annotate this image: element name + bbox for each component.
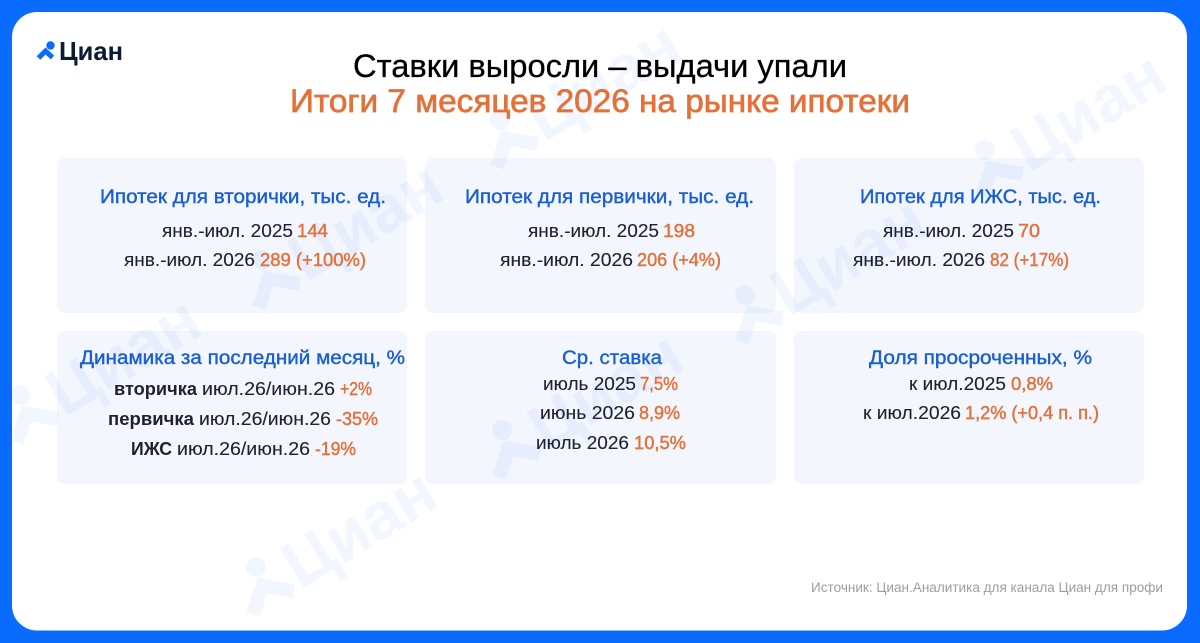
heading: Ср. ставка	[562, 347, 662, 369]
row 2025: 70	[1018, 220, 1040, 241]
row вторичка: +2%	[340, 378, 372, 399]
row июл.2026: 1,2% (+0,4 п. п.)	[965, 402, 1099, 423]
row ИЖС: июл.26/июн.26	[177, 438, 310, 459]
row 2026	[500, 249, 721, 270]
panel: динамика за последний месяц	[57, 331, 407, 484]
title line 2: Итоги 7 месяцев 2026 на рынке ипотеки	[290, 83, 910, 119]
panel: ипотек для ИЖС	[794, 158, 1144, 313]
watermark pattern: Циан	[998, 36, 1178, 185]
row июнь 2026: июнь 2026	[540, 402, 635, 423]
row первичка: -35%	[336, 408, 378, 429]
row 2026: янв.-июл. 2026	[853, 249, 985, 270]
row 2026: янв.-июл. 2026	[500, 249, 633, 270]
panel: доля просроченных	[794, 331, 1144, 484]
row первичка: первичка	[108, 408, 195, 429]
row 2026: 82 (+17%)	[990, 249, 1069, 270]
title	[290, 48, 910, 119]
panel: средняя ставка	[425, 331, 776, 484]
logo wordmark: Циан	[59, 36, 123, 66]
row первичка: июл.26/июн.26	[199, 408, 331, 429]
row июл.2026: к июл.2026	[863, 402, 961, 423]
heading: Ипотек для первички, тыс. ед.	[465, 186, 754, 208]
row ИЖС: ИЖС	[131, 438, 172, 459]
row июль 2026: 10,5%	[634, 432, 686, 453]
row 2025: 198	[663, 220, 695, 241]
watermark pattern: Циан	[758, 181, 938, 330]
watermark pattern: Циан	[269, 453, 449, 602]
row июль 2026	[536, 432, 686, 453]
row первичка	[108, 408, 378, 429]
row 2025: 144	[297, 220, 328, 241]
panel: ипотек для вторички	[57, 158, 407, 313]
row вторичка	[114, 378, 372, 399]
heading: Доля просроченных, %	[869, 347, 1092, 369]
row вторичка: июл.26/июн.26	[202, 378, 335, 399]
row ИЖС	[131, 438, 356, 459]
row июль 2026: июль 2026	[536, 432, 629, 453]
row июль 2025	[543, 373, 678, 394]
row июль 2025: 7,5%	[640, 373, 678, 394]
watermark pattern: Циан	[515, 316, 695, 465]
watermark pattern: Циан	[513, 6, 693, 155]
row июл.2026	[863, 402, 1099, 423]
panel: ипотек для первички	[425, 158, 776, 313]
watermark pattern: Циан	[33, 281, 213, 430]
row июнь 2026: 8,9%	[639, 402, 680, 423]
row 2026: янв.-июл. 2026	[124, 249, 255, 270]
row вторичка: вторичка	[114, 378, 198, 399]
row 2026: 206 (+4%)	[637, 249, 721, 270]
title line 1: Ставки выросли – выдачи упали	[353, 48, 847, 84]
row 2026	[853, 249, 1069, 270]
row июль 2025: июль 2025	[543, 373, 636, 394]
heading: Ипотек для вторички, тыс. ед.	[100, 186, 386, 208]
row июл.2025	[909, 373, 1053, 394]
row 2025: янв.-июл. 2025	[883, 220, 1014, 241]
heading: Ипотек для ИЖС, тыс. ед.	[860, 186, 1101, 208]
icon: logo mark	[38, 41, 55, 58]
source note: Источник: Циан.Аналитика для канала Циан для профи	[811, 580, 1163, 595]
row 2025: янв.-июл. 2025	[528, 220, 659, 241]
row июл.2025: 0,8%	[1011, 373, 1053, 394]
logo: Циан	[38, 36, 123, 66]
row июнь 2026	[540, 402, 680, 423]
row 2025: янв.-июл. 2025	[162, 220, 293, 241]
row 2026	[124, 249, 366, 270]
row июл.2025: к июл.2025	[909, 373, 1006, 394]
heading: Динамика за последний месяц, %	[80, 347, 405, 369]
watermark pattern: Циан	[275, 146, 455, 295]
row 2026: 289 (+100%)	[260, 249, 366, 270]
row ИЖС: -19%	[315, 438, 356, 459]
